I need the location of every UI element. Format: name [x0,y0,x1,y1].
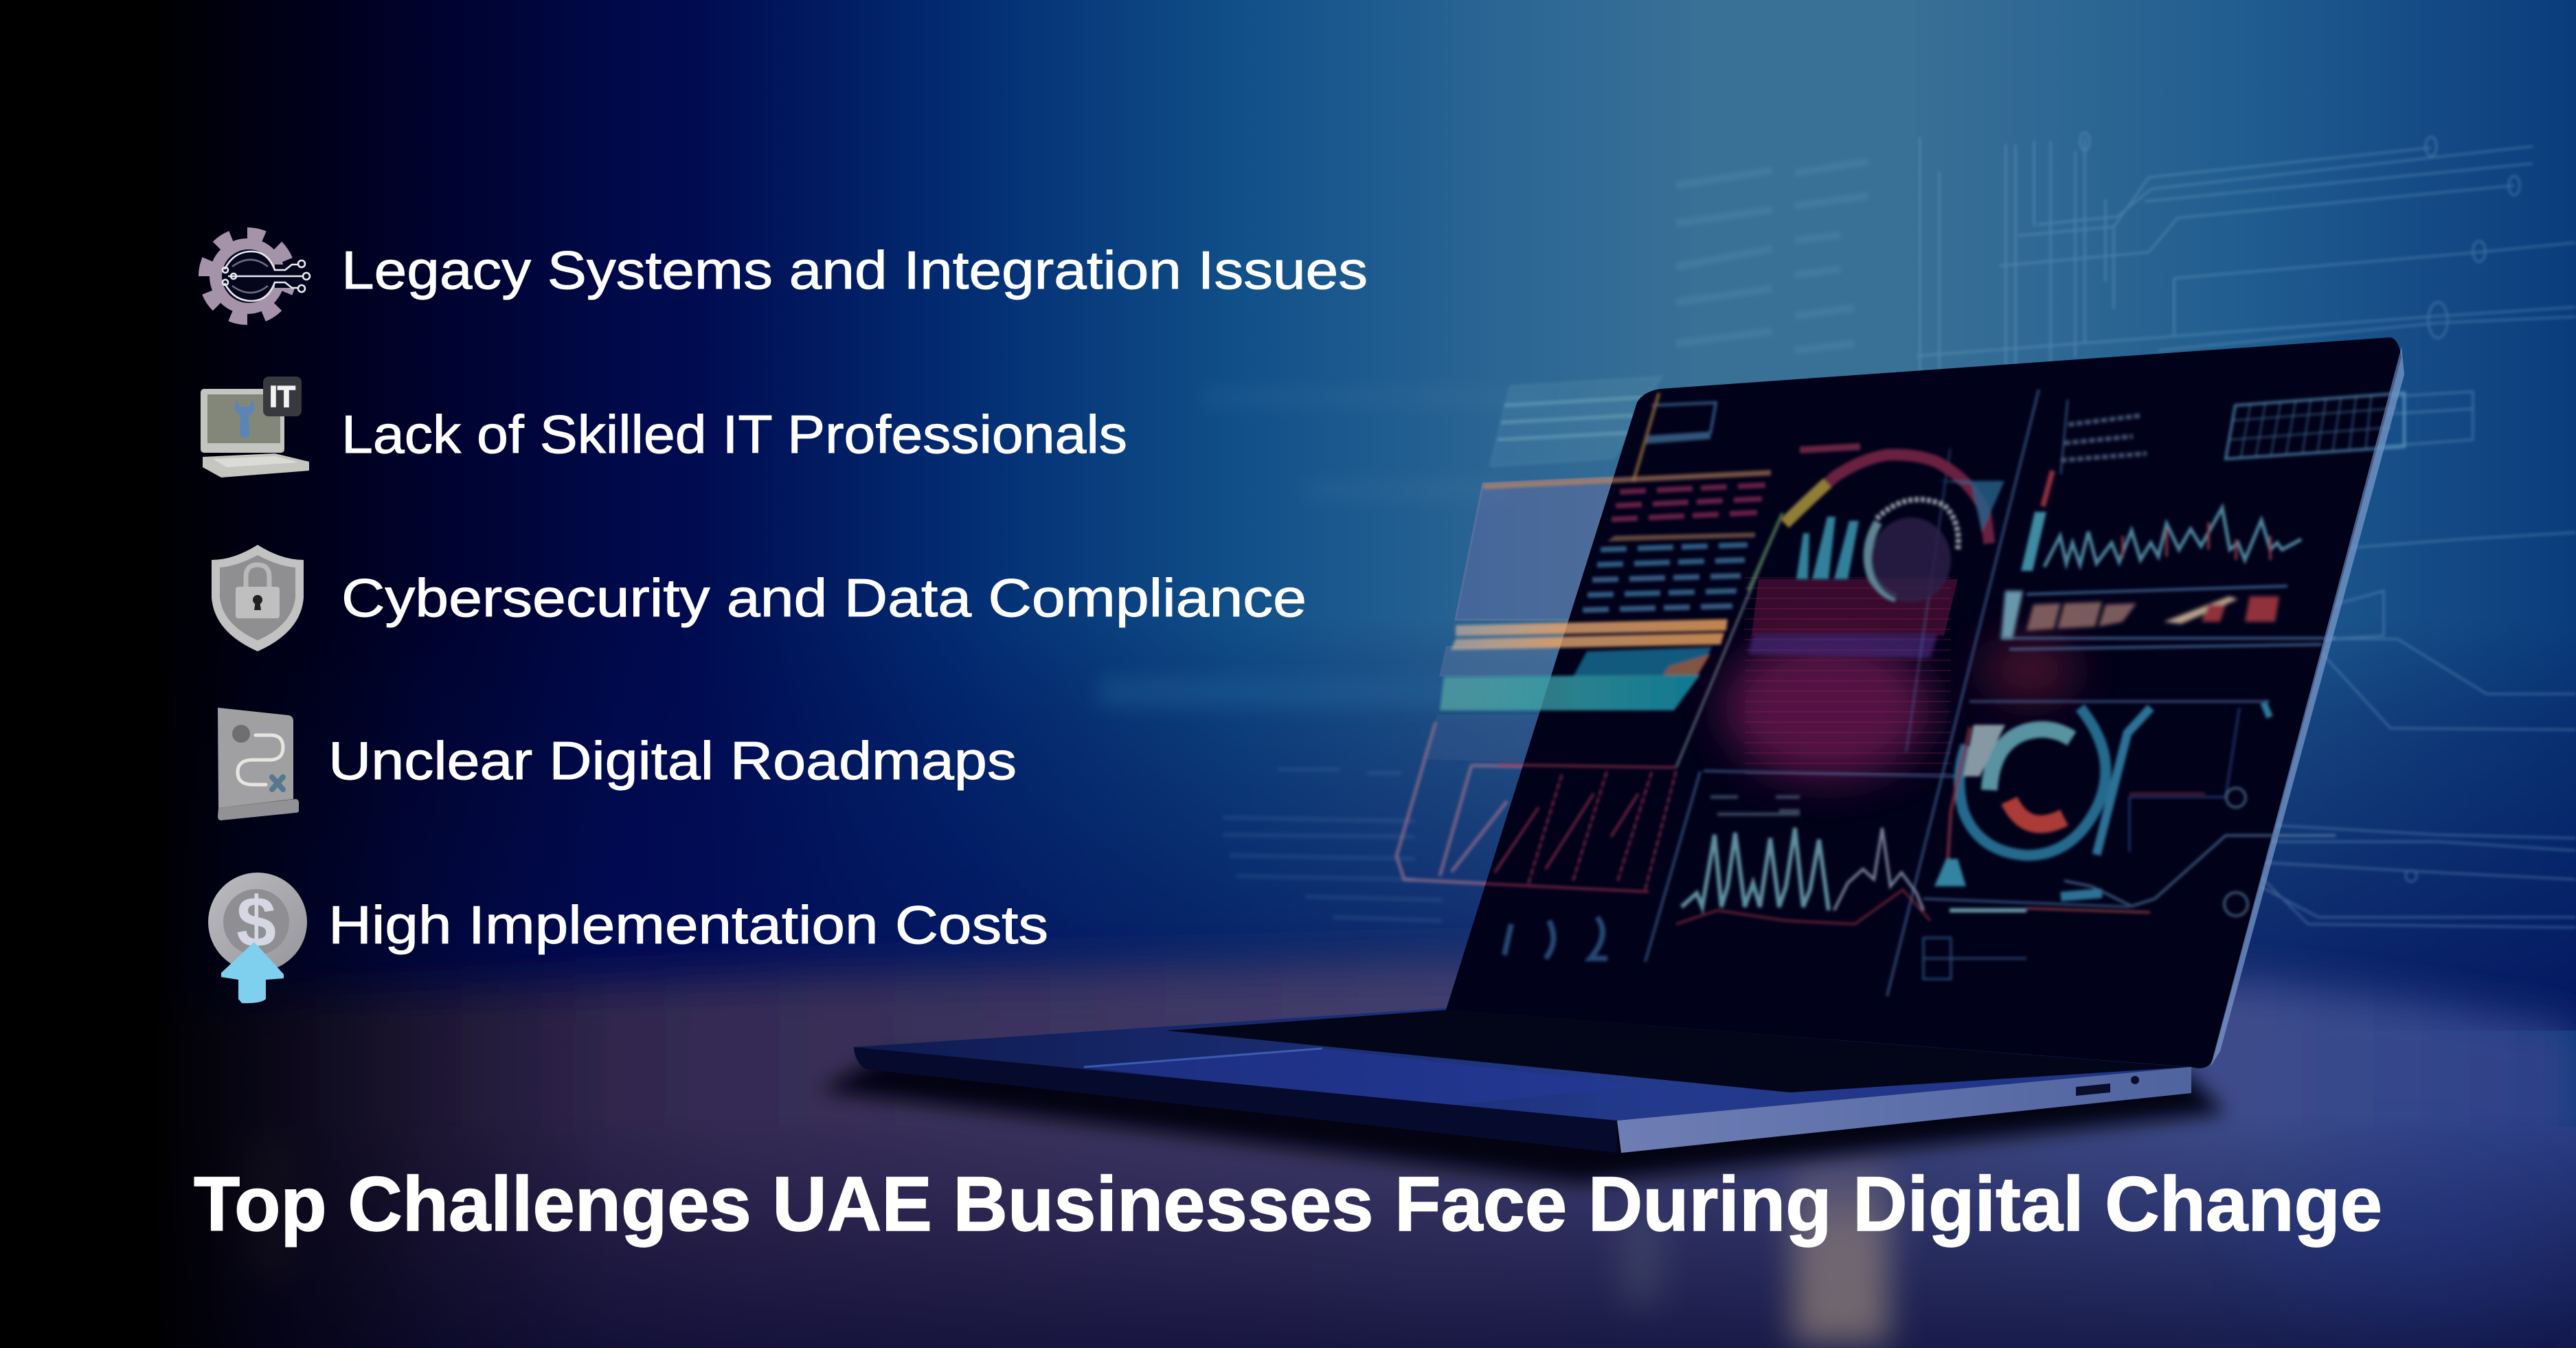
laptop screen: lower left glyphs and legend [1504,917,2026,979]
list text: High Implementation Costs: High Implementation Costs [328,895,1048,955]
laptop screen: top left panel lines [1634,393,1716,481]
icon: laptop with IT badge and wrench [201,377,309,478]
laptop: screen lid [1446,337,2404,1068]
background: faint data readouts upper centre [1676,161,1868,350]
laptop screen: gauge arc and bars [1785,447,2004,603]
icon: gear with circuit [206,235,310,317]
icon: shield with padlock [212,545,304,651]
laptop: keyboard base [854,1008,2191,1153]
title: Top Challenges UAE Businesses Face During Digital Change [194,1161,2382,1247]
icon: roadmap sheet [218,708,299,820]
list text: Unclear Digital Roadmaps: Unclear Digital Roadmaps [328,730,1017,791]
laptop screen: spike chart [1676,797,1930,924]
background: wooden table surface [0,962,2576,1348]
background: faint hologram lines left of laptop [1223,770,1443,921]
laptop screen: panel divider lines [1645,390,2336,996]
laptop screen: red triangle chart [1484,765,1676,892]
list text: Lack of Skilled IT Professionals: Lack of Skilled IT Professionals [341,404,1127,464]
list text: Legacy Systems and Integration Issues: Legacy Systems and Integration Issues [341,240,1368,300]
laptop screen: upper right line chart [2021,393,2404,571]
icon: dollar coin with rising arrow: $ [236,883,276,963]
laptop screen: red glow with scanlines [1724,577,2078,780]
background: left edge fade to black [0,0,618,1348]
background: circuit lines upper right [1917,133,2576,385]
laptop: hologram panels left of screen [1397,377,1660,892]
laptop screen: data table [1583,485,1765,610]
laptop screen: dimming overlay [1446,337,2402,1068]
laptop screen: coloured hologram bands [1440,470,1771,710]
laptop: shadow under base [821,1058,2226,1183]
background: circuit lines right of laptop [2233,392,2576,928]
laptop screen: striped data band [2001,591,2279,638]
icon: dollar coin with rising arrow [208,873,307,1003]
list text: Cybersecurity and Data Compliance: Cybersecurity and Data Compliance [341,568,1307,628]
laptop screen: round dial [1934,702,2336,916]
icon: laptop with IT badge and wrench: IT [269,380,295,414]
